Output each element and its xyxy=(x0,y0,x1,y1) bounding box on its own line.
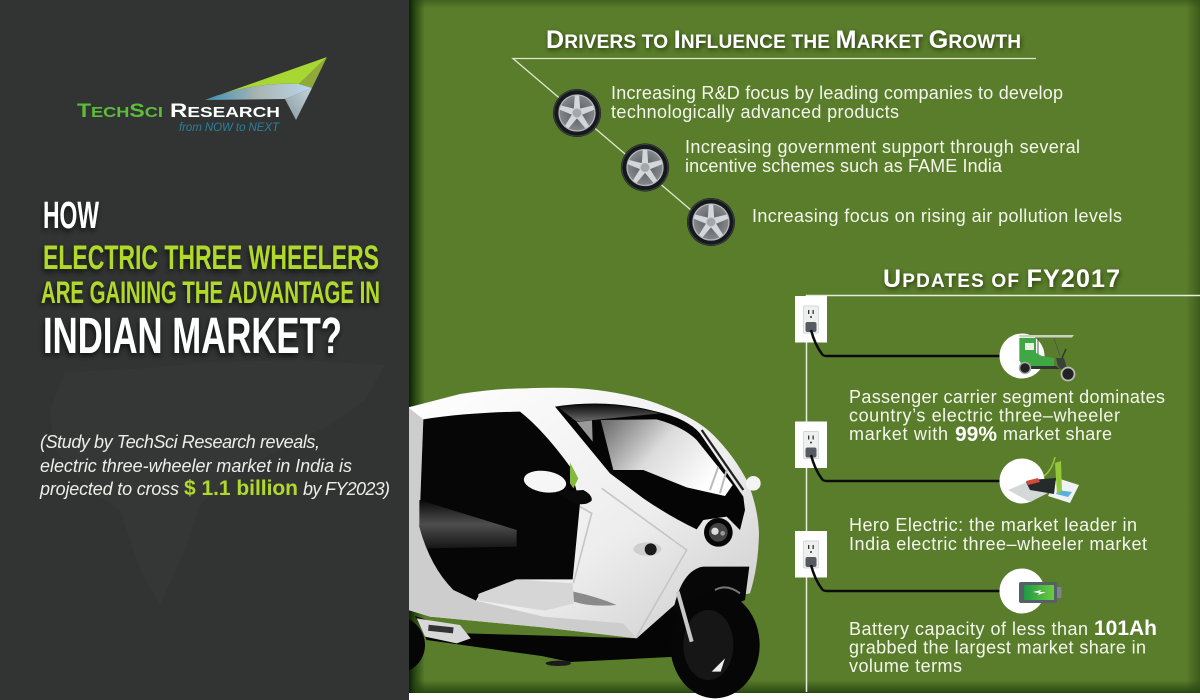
icon: wall socket xyxy=(795,531,827,578)
icon: wall socket xyxy=(795,422,827,468)
logo: TechSci Research xyxy=(77,57,327,134)
windscreen glass xyxy=(601,419,733,496)
study summary: electric three-wheeler market in India is xyxy=(40,456,352,476)
fork xyxy=(678,592,692,642)
left dark panel xyxy=(0,0,409,700)
wiper xyxy=(702,430,743,490)
title: ARE GAINING THE ADVANTAGE IN xyxy=(41,274,380,310)
driver text: Increasing R&D focus by leading companies to develop xyxy=(611,83,1063,103)
update text: market with xyxy=(849,424,948,444)
icon: wheel xyxy=(621,144,669,192)
number plate xyxy=(417,618,471,643)
update 2 xyxy=(795,422,1147,554)
heading: updates: UPDATES OF FY2017 xyxy=(883,265,1120,293)
icon: wheel xyxy=(687,198,735,246)
rear wheel xyxy=(368,617,425,673)
underside xyxy=(415,600,680,662)
update text: 101Ah xyxy=(1094,617,1157,640)
driver text xyxy=(611,83,1063,122)
icon: battery xyxy=(1000,568,1062,614)
rear seat xyxy=(419,500,517,548)
windshield frame xyxy=(555,403,745,530)
driver text: Increasing focus on rising air pollution levels xyxy=(752,206,1122,226)
vehicle body xyxy=(408,388,759,638)
update 1 xyxy=(795,296,1165,446)
study summary: by FY2023) xyxy=(303,479,390,499)
title: ELECTRIC THREE WHEELERS xyxy=(43,239,379,277)
heading: drivers: DRIVERS TO INFLUENCE THE MARKET GROWTH xyxy=(546,26,1021,54)
headlight xyxy=(704,518,733,547)
door opening xyxy=(419,412,580,601)
side indicator xyxy=(633,542,661,556)
green sliver xyxy=(570,463,578,488)
drivers connector line xyxy=(513,58,1036,222)
roof glass xyxy=(558,404,660,422)
mudguard xyxy=(715,587,740,593)
icon: wheel xyxy=(553,89,601,137)
driver text xyxy=(685,137,1080,176)
power cord xyxy=(811,565,1002,591)
driver 3 xyxy=(687,198,1122,246)
power cord xyxy=(811,455,1002,481)
update text: country’s electric three–wheeler xyxy=(849,406,1120,426)
panel shadow xyxy=(573,592,617,606)
rear pillar shade xyxy=(408,407,637,638)
logo wordmark xyxy=(77,101,280,122)
driver 2 xyxy=(621,137,1080,192)
front mirror xyxy=(746,476,761,491)
update text: Passenger carrier segment dominates xyxy=(849,387,1165,407)
green main panel xyxy=(409,0,1200,693)
side glass xyxy=(577,420,593,442)
update text xyxy=(849,617,1157,676)
door mirror xyxy=(522,468,568,495)
update text: grabbed the largest market share in xyxy=(849,638,1146,658)
title: HOW xyxy=(43,195,99,237)
floor step xyxy=(478,579,574,611)
front wheel xyxy=(670,592,760,698)
update text: volume terms xyxy=(849,656,962,676)
title: INDIAN MARKET? xyxy=(43,307,342,364)
driver 1 xyxy=(553,83,1063,137)
update text: market share xyxy=(1003,424,1112,444)
update text xyxy=(849,387,1165,446)
driver text: technologically advanced products xyxy=(611,102,899,122)
mirror arm xyxy=(557,490,592,504)
update text: Hero Electric: the market leader in xyxy=(849,515,1137,535)
updates rail lines xyxy=(806,296,1200,692)
logo tagline: from NOW to NEXT xyxy=(179,122,280,134)
update text: India electric three–wheeler market xyxy=(849,534,1147,554)
power cord xyxy=(811,330,1002,356)
study summary xyxy=(39,432,390,500)
update 3 xyxy=(795,531,1157,676)
update text xyxy=(849,515,1147,554)
icon: chart and papers xyxy=(1000,457,1079,504)
title xyxy=(41,195,380,364)
logo wordmark: TECH SCI xyxy=(77,101,163,122)
study summary: (Study by TechSci Research reveals, xyxy=(40,432,320,452)
logo mark xyxy=(205,57,327,120)
faint India map xyxy=(50,360,385,605)
icon: wall socket xyxy=(795,296,827,342)
dash pillar xyxy=(710,467,727,493)
body panel lines xyxy=(573,488,687,637)
update text: Battery capacity of less than xyxy=(849,619,1088,639)
study summary: projected to cross xyxy=(39,479,179,499)
driver text: Increasing government support through several xyxy=(685,137,1080,157)
electric three wheeler photo xyxy=(368,388,761,698)
update text: 99% xyxy=(955,423,997,446)
logo wordmark: RESEARCH xyxy=(170,101,280,122)
icon: e-rickshaw xyxy=(1000,334,1074,380)
driver text: incentive schemes such as FAME India xyxy=(685,156,1003,176)
study summary: $ 1.1 billion xyxy=(184,477,298,500)
wheel arch xyxy=(673,567,749,623)
